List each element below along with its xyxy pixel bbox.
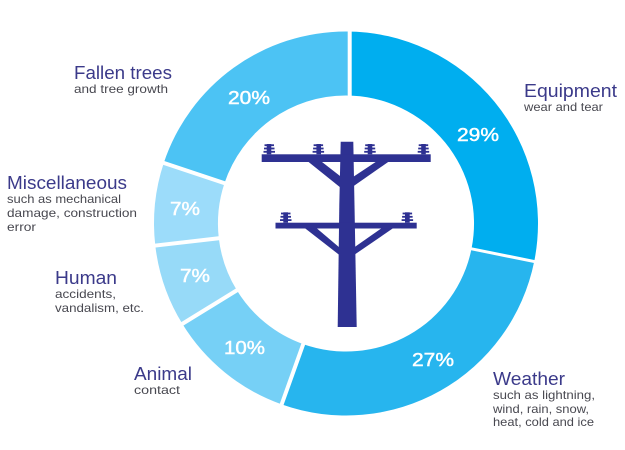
insulators: upper arm [264,144,429,154]
percent: miscellaneous 7%: 7% [170,199,200,219]
label: human: Human [55,268,117,288]
label: weather: such as lightning, [493,388,595,402]
label: human [55,268,144,315]
label: miscellaneous: error [7,220,36,234]
label: equipment [523,81,617,114]
label: weather [492,369,595,429]
label: animal [134,364,192,397]
insulators: lower arm [280,212,413,223]
percent: 10%: 10% [224,338,265,358]
label: animal: Animal [134,364,192,384]
donut chart [150,26,540,416]
icon: utility pole [262,142,431,327]
label: miscellaneous: Miscellaneous [7,173,127,193]
percent: 20%: 20% [228,88,270,108]
label: equipment: Equipment [524,81,617,101]
segment: human 7% [155,238,237,324]
label: weather: Weather [493,369,565,389]
label: fallen trees: and tree growth [74,82,168,96]
segment: equipment 29% [346,32,538,262]
segment: weather 27% [282,249,534,416]
percent: human 7%: 7% [180,266,210,286]
label: miscellaneous: such as mechanical [7,192,121,206]
label: equipment: wear and tear [523,100,603,114]
label: miscellaneous [7,173,137,234]
percent: 29%: 29% [457,125,499,145]
segment: animal 10% [182,290,303,404]
label: fallen trees [74,63,172,96]
label: human: accidents, [55,287,116,301]
label: human: vandalism, etc. [55,301,144,315]
label: animal: contact [134,383,181,397]
percent: 27%: 27% [412,350,454,370]
label: fallen trees: Fallen trees [74,63,172,83]
segment: miscellaneous 7% [154,163,224,246]
segment: fallen trees 20% [164,32,349,183]
label: miscellaneous: damage, construction [7,206,137,220]
label: weather: wind, rain, snow, [492,402,589,416]
label: weather: heat, cold and ice [493,415,594,429]
